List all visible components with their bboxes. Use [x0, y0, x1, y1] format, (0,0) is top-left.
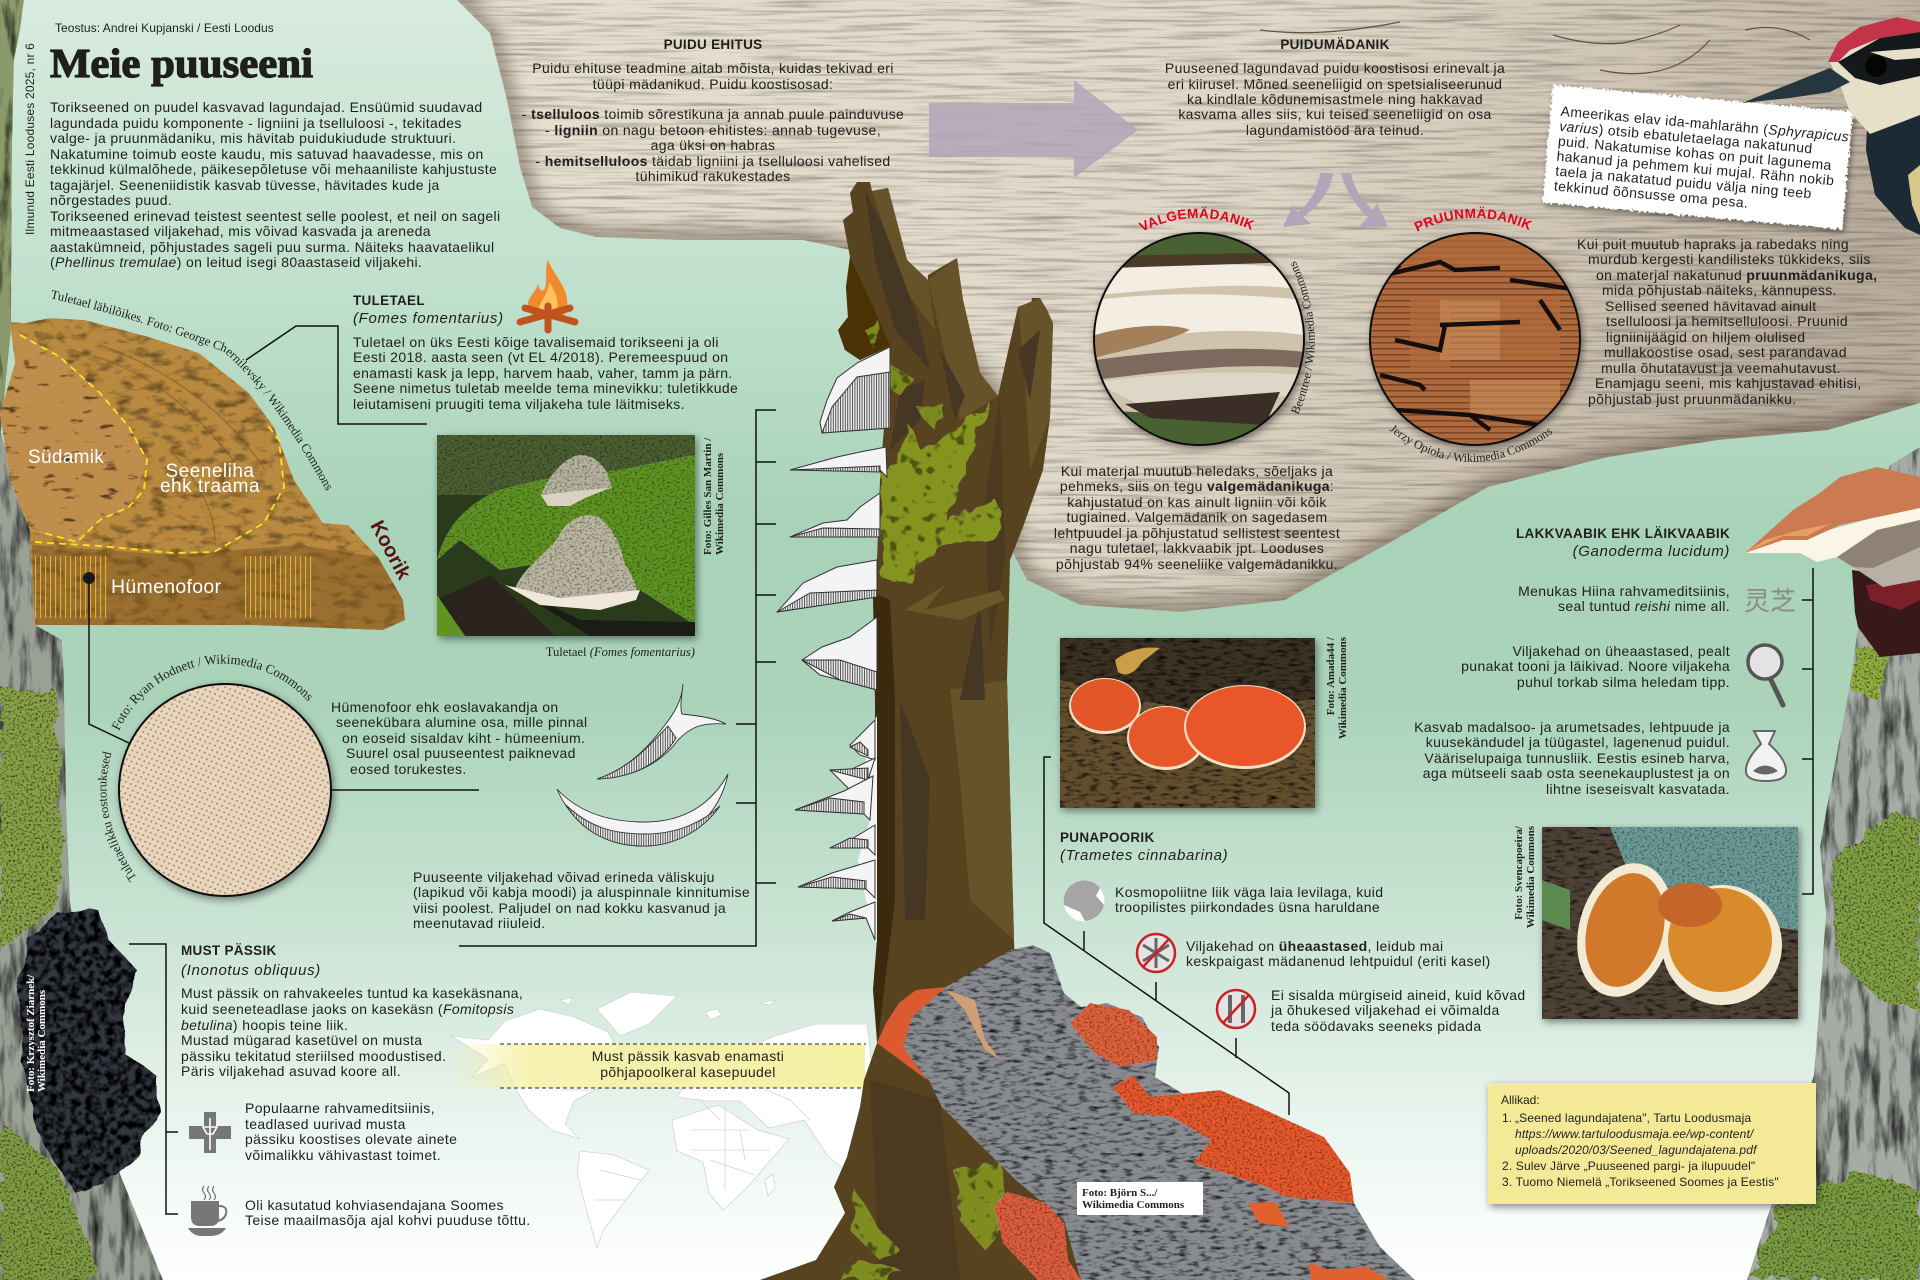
text: medicine: pässiku koostises olevate ainete [245, 1131, 457, 1147]
panel: puidumädanik text: kasvama alles siis, kui teised seeneliigid on osa [1178, 106, 1492, 122]
text: not edible [1270, 987, 1526, 1034]
panel: lakkvaabik text [1414, 526, 1730, 797]
highlighted band: Must pässik range: Must pässik kasvab enamasti [592, 1048, 784, 1064]
bracket: fruit body shapes [459, 410, 776, 946]
panel: lakkvaabik text: kuusekändudel ja tüügastel, lagenenud puidul. [1426, 734, 1730, 750]
text: annual: Viljakehad on üheaastased, leidub mai [1186, 938, 1443, 954]
panel: puidu ehitus text: - tselluloos toimib sõrestikuna ja annab puule painduvuse [522, 106, 904, 122]
highlighted band: Must pässik range: põhjapoolkeral kasepuudel [600, 1064, 776, 1080]
panel: tuletael text: TULETAEL [353, 293, 425, 308]
circle photo: pores [119, 684, 331, 896]
text: medicine: võimalikku vähivastast toimet. [245, 1147, 441, 1163]
text: cosmopolitan [1115, 884, 1383, 915]
panel: must pässik text: pässiku tekitatud steriilsed moodustised. [181, 1048, 446, 1064]
intro text: lagundada puidu komponente - ligniini ja tselluloosi -, tekitades [50, 115, 462, 131]
text: not edible: teda söödavaks seeneks pidada [1271, 1018, 1481, 1034]
photo credit: Gilles San Martin: Foto: Gilles San Martin / [702, 437, 714, 555]
text: coffee [245, 1197, 531, 1228]
panel: must pässik text [181, 943, 523, 1079]
icon: campfire [520, 260, 575, 330]
panel: tuletael text: enamasti kask ja lepp, harvem haab, vaher, tamm ja pärn. [353, 365, 733, 381]
photo credit: Amada44: Foto: Amada44 / [1325, 636, 1337, 715]
intro text: nõrgestades puud. [50, 192, 172, 208]
panel: punapoorik text [1060, 830, 1228, 864]
bracket: punapoorik [1044, 757, 1289, 1115]
chaga photo credit: Wikimedia Commons [36, 989, 48, 1092]
leader line: hymenophore to circle [89, 578, 129, 743]
text: hymenophore [331, 699, 587, 777]
panel: sources [1488, 1083, 1816, 1204]
panel: puidumädanik text: eri kiirusel. Mõned seeneliigid on spetsialiseerunud [1168, 76, 1502, 92]
panel: must pässik text: MUST PÄSSIK [181, 943, 277, 958]
text: medicine: Populaarne rahvameditsiinis, [245, 1100, 435, 1116]
photo: tuletael on mossy log [437, 435, 695, 640]
panel: lakkvaabik text: punakat tooni ja läikivad. Noore viljakeha [1461, 658, 1730, 674]
panel: puidumädanik text: Puuseened lagundavad puidu koostisosi erinevalt ja [1165, 60, 1505, 76]
panel: tuletael text: Seene nimetus tuletab meelde tema minevikku: tuletikkude [353, 380, 738, 396]
text: hymenophore: Suurel osal puuseentest paiknevad [346, 745, 576, 761]
cross-section credit: Tuletael läbilõikes. Foto: George Chernilevsky / Wikimedia Commons [52, 290, 332, 490]
panel: lakkvaabik text: LAKKVAABIK EHK LÄIKVAABIK [1516, 526, 1730, 541]
bracket: lakkvaabik [1802, 568, 1813, 894]
arrow: to brown rot [1341, 173, 1388, 227]
text: hymenophore: eosed torukestes. [350, 761, 467, 777]
fungus cross-section [0, 318, 405, 630]
panel: lakkvaabik text: lihtne iseseisvalt kasvatada. [1546, 781, 1730, 797]
text: fruit body shapes [413, 869, 750, 931]
bark: left top strip [0, 0, 24, 440]
photo credit: Gilles San Martin: Wikimedia Commons [714, 452, 726, 555]
note: woodpecker paper: Ameerikas elav ida-mahlarähn (Sphyrapicus [1560, 103, 1850, 144]
leader line: pores [331, 789, 479, 791]
panel: must pässik text: (Inonotus obliquus) [181, 962, 321, 979]
note: woodpecker paper: tekkinud õõnsusse oma pesa. [1553, 178, 1749, 211]
text: white rot: lehtpuudel ja põhjustatud sellistest seentest [1054, 525, 1340, 541]
icon: coffee cup [188, 1186, 226, 1236]
arrow: to white rot [1283, 173, 1333, 227]
panel: must pässik text: Mustad mügarad kasetüvel on musta [181, 1032, 422, 1048]
woodpecker [1742, 17, 1920, 235]
intro text: Torikseened on puudel kasvavad lagundajad. Ensüümid suudavad [50, 99, 483, 115]
shelf fungi diagrams along trunk [777, 347, 890, 942]
panel: puidu ehitus text [522, 37, 904, 184]
text: white rot: põhjustab 94% seeneliike valgemädanikku. [1056, 556, 1338, 572]
chaga photo credit: Foto: Krzysztof Ziarnek/ [25, 974, 37, 1092]
mushroom: lakkvaabik on right trunk [1745, 467, 1920, 657]
photo caption: Tuletael (Fomes fomentarius) [546, 645, 695, 659]
tree trunk illustration [760, 182, 1100, 1280]
credit: Ryan Hodnett: Foto: Ryan Hodnett / Wikimedia Commons [111, 654, 312, 731]
panel: sources: „Seened lagundajatena", Tartu Loodusmaja [1515, 1111, 1751, 1125]
text: cosmopolitan: troopilistes piirkondades üsna haruldane [1115, 899, 1380, 915]
photo credit: Svencapoeira: Foto: Svencapoeira/ [1513, 825, 1525, 920]
text: white rot [1054, 463, 1340, 572]
text: brown rot: ligniinijäägid on hiljem olulised [1606, 329, 1805, 345]
circle photo: brown rot [1370, 233, 1582, 447]
panel: puidu ehitus text: PUIDU EHITUS [664, 37, 762, 52]
panel: tuletael text: Eesti 2018. aasta seen (vt EL 4/2018). Peremeespuud on [353, 349, 728, 365]
chaga photo credit [25, 974, 48, 1092]
panel: tuletael text: leiutamiseni pruugiti tema viljakeha tule läitmiseks. [353, 396, 685, 412]
photo credit: Amada44 [1325, 636, 1349, 739]
icon: reishi characters: 灵芝 [1744, 581, 1796, 618]
panel: puidumädanik text: ka kindlale kõdunemisastmele ning hakkavad [1187, 91, 1483, 107]
icon: globe [1064, 880, 1104, 922]
panel: tuletael text: (Fomes fomentarius) [353, 310, 504, 327]
note: woodpecker paper: puid. Nakatumise kohas on puit lagunema [1557, 133, 1832, 173]
panel: sources: 3. Tuomo Niemelä „Torikseened Soomes ja Eestis" [1502, 1175, 1779, 1189]
label: Hümenofoor: Hümenofoor [111, 576, 222, 598]
text: hymenophore: seenekübara alumine osa, mille pinnal [336, 714, 587, 730]
text: fruit body shapes: meenutavad riiuleid. [413, 915, 546, 931]
text: annual: keskpaigast mädanenud lehtpuidul (eriti kasel) [1186, 953, 1491, 969]
standalone shelf profile B [557, 774, 728, 846]
text: fruit body shapes: (lapikud või kabja moodi) ja aluspinnale kinnitumise [413, 884, 750, 900]
photo: lakkvaabik [1542, 827, 1798, 1019]
intro text: mitmeaastased viljakehad, mis võivad kasvada ja areneda [50, 223, 431, 239]
text: white rot: kahjustatud on kas ainult ligniin või kõik [1067, 494, 1327, 510]
text: brown rot: Enamjagu seeni, mis kahjustavad ehitisi, [1595, 375, 1862, 391]
icon: medical cross [189, 1112, 231, 1153]
arrow: large [929, 80, 1138, 178]
text: cosmopolitan: Kosmopoliitne liik väga laia levilaga, kuid [1115, 884, 1383, 900]
credit: Jerzy Opioła: Jerzy Opioła / Wikimedia Commons [1389, 424, 1552, 462]
panel: puidumädanik text: PUIDUMÄDANIK [1280, 37, 1390, 52]
text: brown rot: Sellised seened hävitavad ainult [1605, 298, 1817, 314]
intro text: tekkinud külmalõhede, päikesepõletuse või mehaaniliste kahjustuste [50, 161, 497, 177]
text: fruit body shapes: viisi poolest. Paljudel on nad kokku kasvanud ja [413, 900, 726, 916]
note: woodpecker paper [1543, 85, 1853, 229]
panel: lakkvaabik text: Vääriselupaiga tunnusliik. Eestis esineb harva, [1424, 750, 1730, 766]
text: white rot: tugiained. Valgemädanik on sagedasem [1067, 509, 1327, 525]
intro text [50, 99, 500, 270]
label: pruunmädanik: PRUUNMÄDANIK [1414, 206, 1532, 232]
label: Koorik: Koorik [366, 517, 415, 584]
intro text: aastakümneid, põhjustades sageli puu surma. Näiteks haavataelikul [50, 239, 494, 255]
text: brown rot: murdub kergesti kandilisteks tükkideks, siis [1588, 251, 1871, 267]
text: brown rot: mullakoostise osad, sest parandavad [1604, 344, 1847, 360]
photo credit: Amada44: Wikimedia Commons [1337, 636, 1349, 739]
text: brown rot: on materjal nakatunud pruunmädanikuga, [1596, 267, 1877, 283]
photo credit on log: Wikimedia Commons [1082, 1199, 1185, 1211]
text: brown rot: mida põhjustab näiteks, kännupess. [1602, 282, 1837, 298]
panel: lakkvaabik text: seal tuntud reishi nime all. [1558, 598, 1730, 614]
label: Südamik: Südamik [28, 447, 104, 468]
text: brown rot: tselluloosi ja hemitselluloosi. Pruunid [1606, 313, 1848, 329]
panel: punapoorik text: PUNAPOORIK [1060, 830, 1155, 845]
panel: lakkvaabik text: aga mütseeli saab osta seenekauplustest ja on [1423, 765, 1730, 781]
text: medicine: teadlased uurivad musta [245, 1116, 406, 1132]
text: brown rot: Kui puit muutub hapraks ja rabedaks ning [1577, 236, 1849, 252]
photo credit: Svencapoeira [1513, 825, 1537, 928]
intro text: valge- ja pruunmädaniku, mis hävitab puidukiudude struktuuri. [50, 130, 456, 146]
note: woodpecker paper: hakanud ja pehmem kui mujal. Rähn nokib [1556, 148, 1835, 188]
panel: must pässik text: Päris viljakehad asuvad koore all. [181, 1063, 401, 1079]
label: Seeneliha: Seeneliha [165, 461, 255, 482]
credit: eostorukesed: Tuletaelikku eostorukesed [98, 752, 136, 882]
text: fruit body shapes: Puuseente viljakehad võivad erineda väliskuju [413, 869, 715, 885]
panel: sources: https://www.tartuloodusmaja.ee/wp-content/ [1515, 1127, 1755, 1141]
text: white rot: Kui materjal muutub heledaks, sõeljaks ja [1061, 463, 1333, 479]
leader line: tuletael [246, 326, 427, 424]
bark: right trunk [1747, 447, 1920, 1280]
text: brown rot: mulla õhutatavust ja veemahutavust. [1601, 360, 1841, 376]
panel: must pässik text: betulina) hoopis teine liik. [181, 1017, 348, 1033]
intro text: Nakatumine toimub eoste kaudu, mis satuvad haavadesse, mis on [50, 146, 484, 162]
panel: sources: 1. [1502, 1111, 1512, 1125]
icon: spawn bag [1746, 731, 1786, 781]
panel: lakkvaabik text: puhul torkab silma heledam tipp. [1517, 674, 1730, 690]
label: valgemädanik: VALGEMÄDANIK [1138, 206, 1255, 230]
text: brown rot: põhjustab just pruunmädanikku. [1588, 391, 1796, 407]
panel: sources: Allikad: [1501, 1093, 1540, 1107]
credit line: Teostus: Andrei Kupjanski / Eesti Loodus [55, 21, 274, 35]
icon: crossed cutlery [1217, 990, 1255, 1028]
panel: puidu ehitus text: aga üksi on habras [651, 137, 775, 153]
photo credit: Gilles San Martin [702, 437, 726, 555]
bark: left bottom trunk [0, 430, 163, 1280]
panel: puidumädanik text: lagundamistööd ära teinud. [1246, 122, 1424, 138]
panel: lakkvaabik text: Viljakehad on üheaastased, pealt [1512, 643, 1730, 659]
circle photo: white rot [1090, 230, 1310, 450]
label: Seeneliha [160, 461, 260, 497]
intro text: Torikseened erinevad teistest seentest selle poolest, et neil on sageli [50, 208, 500, 224]
panel: lakkvaabik text: (Ganoderma lucidum) [1573, 543, 1730, 560]
text: white rot: pehmeks, siis on tegu valgemädanikuga: [1060, 478, 1334, 494]
vertical publication note: Ilmunud Eesti Looduses 2025, nr 6 [23, 43, 37, 235]
label: Seeneliha: ehk traama [160, 476, 260, 497]
text: white rot: nagu tuletael, lakkvaabik jpt. Looduses [1070, 540, 1324, 556]
panel: punapoorik text: (Trametes cinnabarina) [1060, 847, 1228, 864]
text: not edible: ja õhukesed viljakehad ei võimalda [1270, 1002, 1500, 1018]
panel: puidu ehitus text: Puidu ehituse teadmine aitab mõista, kuidas tekivad eri [532, 60, 894, 76]
panel: tuletael text: Tuletael on üks Eesti kõige tavalisemaid torikseeni ja oli [353, 334, 719, 350]
title: Meie puuseeni [50, 40, 313, 86]
icon: magnifier [1748, 645, 1783, 705]
photo: punapoorik [1060, 638, 1315, 808]
standalone shelf profile A [597, 684, 726, 779]
text: medicine [245, 1100, 457, 1163]
photo credit on log [1077, 1182, 1203, 1215]
note: woodpecker paper: taela ja nakatatud puidu välja ning teeb [1555, 163, 1812, 201]
panel: wood background [457, 0, 1920, 612]
panel: must pässik text: kuid seeneteadlase jaoks on kasekäsn (Fomitopsis [181, 1001, 514, 1017]
text: not edible: Ei sisalda mürgiseid aineid, kuid kõvad [1271, 987, 1526, 1003]
bracket: must pässik [129, 944, 178, 1214]
intro text: (Phellinus tremulae) on leitud isegi 80aastaseid viljakehi. [50, 254, 422, 270]
world map [451, 992, 880, 1248]
note: woodpecker paper: varius) otsib ebatuletaelaga nakatunud [1559, 118, 1813, 156]
credit: Beentree: Beentree / Wikimedia Commons [1290, 262, 1315, 415]
text: coffee: Teise maailmasõja ajal kohvi puuduse tõttu. [245, 1212, 531, 1228]
panel: must pässik text: Must pässik on rahvakeeles tuntud ka kasekäsnana, [181, 985, 523, 1001]
intro text: tagajärjel. Seeneniidistik kasvab tüvesse, hävitades kude ja [50, 177, 440, 193]
text: annual [1186, 938, 1491, 969]
log with cinnabar polypore [877, 945, 1415, 1280]
text: hymenophore: Hümenofoor ehk eoslavakandja on [331, 699, 559, 715]
text: hymenophore: on eoseid sisaldav kiht - hümeenium. [342, 730, 585, 746]
highlighted band: Must pässik range [448, 1044, 866, 1088]
panel: puidu ehitus text: - ligniin on nagu betoon ehitistes: annab tugevuse, [545, 122, 881, 138]
panel: tuletael text [353, 293, 738, 412]
photo credit: Svencapoeira: Wikimedia Commons [1525, 825, 1537, 928]
panel: puidu ehitus text: - hemitselluloos täidab ligniini ja tselluloosi vahelised [535, 153, 891, 169]
panel: sources: 2. Sulev Järve „Puuseened pargi- ja ilupuudel" [1502, 1159, 1755, 1173]
moss patch on trunk [840, 320, 1010, 1280]
text: brown rot [1577, 236, 1877, 407]
text: coffee: Oli kasutatud kohviasendajana Soomes [245, 1197, 504, 1213]
panel: lakkvaabik text: Menukas Hiina rahvameditsiinis, [1518, 583, 1730, 599]
panel: puidumädanik text [1165, 37, 1505, 138]
panel: sources: uploads/2020/03/Seened_lagundajatena.pdf [1515, 1143, 1758, 1157]
icon: crossed snowflake [1137, 934, 1175, 972]
chaga fungus: black growth [17, 910, 161, 1193]
panel: puidu ehitus text: tüüpi mädanikud. Puidu koostisosad: [593, 76, 833, 92]
panel: lakkvaabik text: Kasvab madalsoo- ja arumetsades, lehtpuude ja [1414, 719, 1730, 735]
photo credit on log: Foto: Björn S.../ [1082, 1187, 1158, 1199]
panel: puidu ehitus text: tühimikud rakukestades [636, 168, 790, 184]
